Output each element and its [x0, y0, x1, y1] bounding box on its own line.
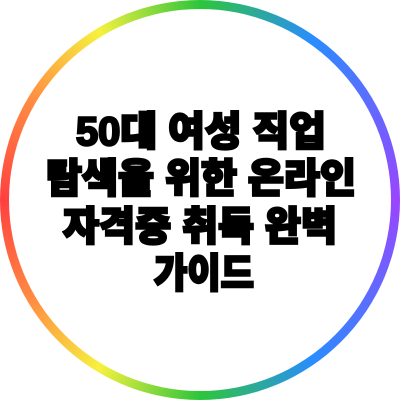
- title line 3: 자격증 취득 완벽: [63, 205, 337, 249]
- title line 4: 가이드: [154, 252, 254, 296]
- title line 1: 50대 여성 직업: [76, 110, 326, 154]
- title line 2: 탐색을 위한 온라인: [46, 157, 356, 201]
